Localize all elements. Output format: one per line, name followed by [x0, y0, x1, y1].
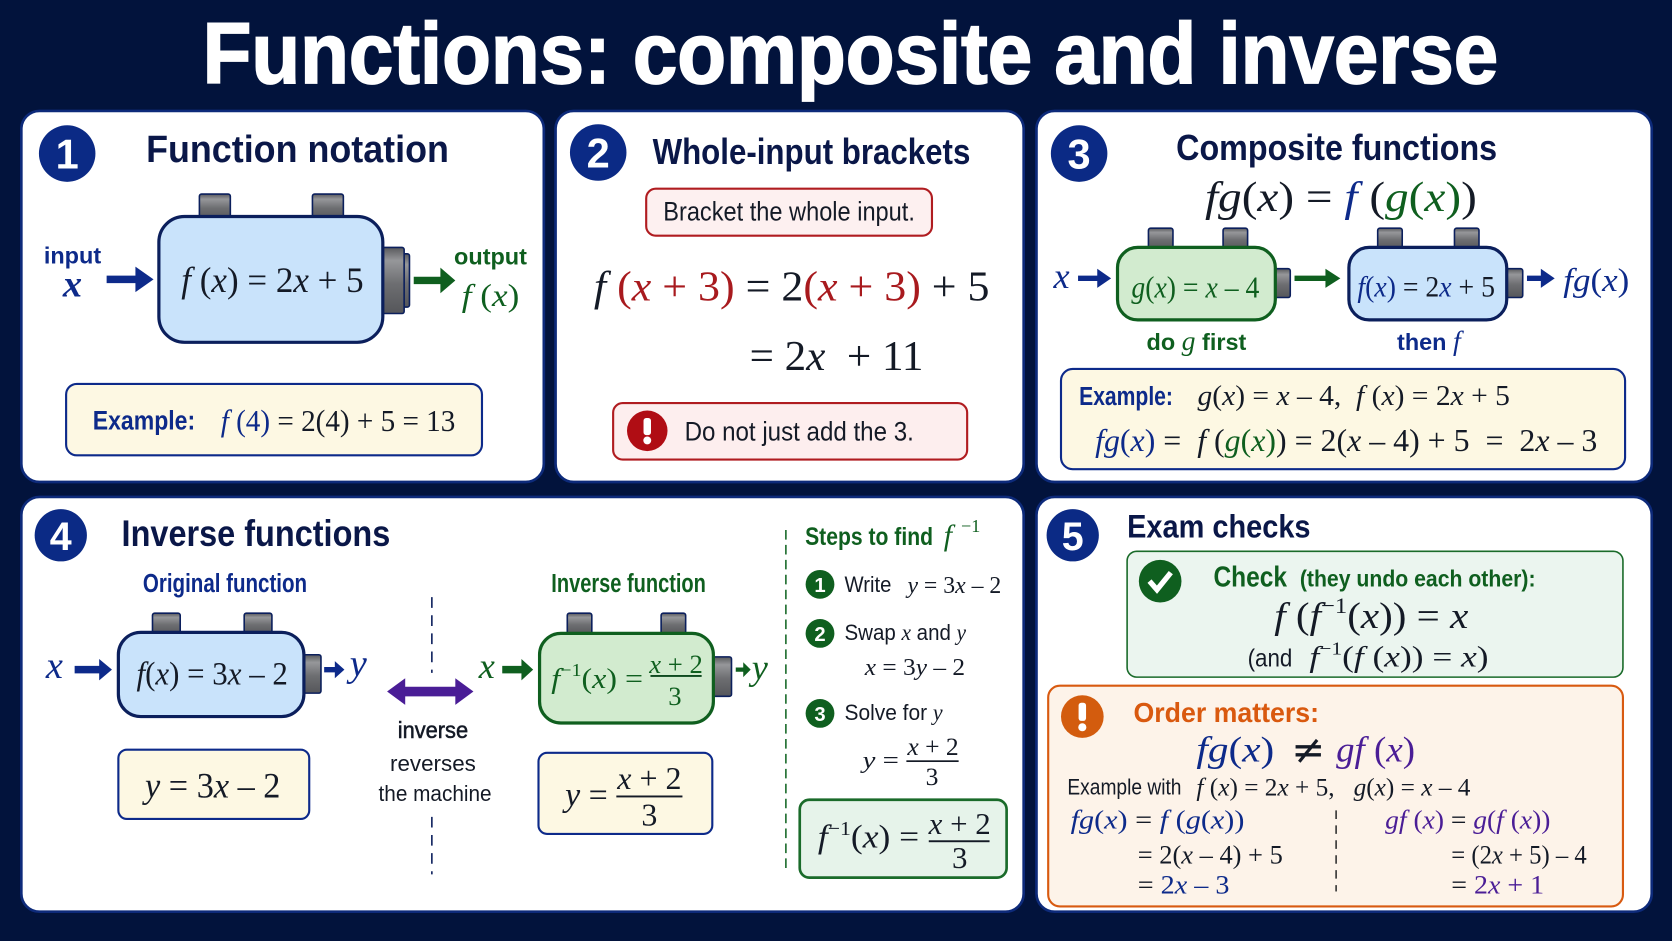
working: gf: gf (x) = g(f (x)) [1385, 805, 1550, 835]
badge 2 [570, 124, 626, 181]
check box: ( [1342, 640, 1354, 673]
badge 1: 1 [56, 130, 79, 177]
result box: f [818, 820, 832, 856]
working: gf: = 2x + 1 [1451, 870, 1544, 900]
step 1: 1 [814, 575, 826, 597]
double arrow [387, 678, 473, 705]
badge 2: 2 [587, 129, 610, 176]
inverse machine: x + 2 [648, 649, 703, 679]
equation box: y = (x+2)/3 [538, 753, 712, 834]
order matters box: Example with [1067, 774, 1181, 799]
inverse machine: f [551, 663, 565, 695]
composite formula: fg(x) = f (g(x)) [1205, 174, 1477, 221]
steps heading: Steps to find [805, 524, 933, 551]
result box: ( [851, 820, 863, 856]
result box: −1 [828, 818, 851, 840]
inequality: fg(x) [1196, 729, 1274, 769]
example box: g(x) = x – 4, f (x) = 2x + 5 [1197, 380, 1510, 412]
example box [1061, 369, 1625, 469]
check box: ( [1347, 596, 1361, 637]
step 1 [806, 570, 1001, 599]
inverse machine: ( [582, 663, 592, 695]
title: Functions: composite and inverse [203, 6, 1498, 102]
working: gf [1385, 805, 1587, 900]
arrow out green [736, 662, 751, 677]
equation box: y = (x+2)/3: 3 [641, 796, 657, 832]
check box: x)) = x [1361, 596, 1467, 637]
machine f [1349, 228, 1523, 320]
badge 3 [1051, 125, 1107, 182]
output arrow [414, 268, 455, 293]
heading: function notation: Function notation [146, 128, 449, 171]
heading: inverse functions: Inverse functions [122, 512, 390, 554]
arrow out [324, 661, 344, 678]
caption: inverse reverses the machine: inverse [398, 717, 468, 743]
inverse function label: Inverse function [551, 570, 706, 598]
caption: then f: then f [1397, 325, 1464, 356]
example box: f (4) = 2(4) + 5 = 13 [221, 403, 455, 438]
step 2: Swap x and y [845, 620, 967, 646]
panel 1: function notation [21, 111, 544, 482]
equation line 1: f (x + 3) = 2(x + 3) + 5 [594, 264, 990, 311]
inverse machine: 3 [668, 681, 682, 711]
order matters box [1048, 686, 1623, 906]
input arrow [107, 267, 154, 292]
step 3: 3 [926, 762, 938, 791]
result box: 3 [952, 840, 967, 875]
original function label: Original function [143, 570, 307, 598]
panel 2: whole-input brackets [556, 111, 1024, 482]
icon: warning [1061, 695, 1104, 738]
check box: f (f [1274, 596, 1320, 637]
working: fg [1071, 805, 1283, 900]
icon: check [1139, 560, 1181, 602]
output y: y [346, 643, 368, 685]
panel 5: exam checks [1036, 497, 1652, 912]
output label: f (x) [462, 277, 519, 313]
input x green: x [478, 646, 495, 686]
equation line 2: = 2x + 11 [750, 333, 923, 380]
steps heading: −1 [952, 516, 980, 536]
caption: inverse reverses the machine: reverses [390, 751, 476, 776]
arrow between machines [1295, 269, 1340, 288]
badge 1 [39, 125, 95, 182]
example box: Example: [93, 406, 195, 436]
warning box: Do not just add the 3. [685, 416, 914, 446]
result box: x) = [863, 820, 916, 856]
arrow out [1527, 269, 1555, 288]
machine g [1118, 228, 1290, 320]
heading: exam checks: Exam checks [1127, 508, 1311, 544]
example box: fg(x) = f (g(x)) = 2(x – 4) + 5 = 2x – 3 [1095, 422, 1597, 458]
check box: (and [1248, 645, 1292, 672]
order matters box: f (x) = 2x + 5, g(x) = x – 4 [1196, 772, 1471, 801]
arrow in green [502, 659, 533, 680]
step 2: x = 3y – 2 [864, 654, 965, 681]
step 2 [806, 619, 967, 681]
panel 4: inverse functions [21, 497, 1024, 912]
step 2: 2 [814, 624, 826, 646]
check box: (they undo each other): [1300, 565, 1536, 591]
order matters box: Order matters: [1134, 697, 1319, 728]
working: fg: = 2(x – 4) + 5 [1138, 840, 1283, 870]
arrow in [1078, 269, 1111, 288]
inequality: gf (x) [1336, 729, 1415, 769]
warning box [613, 403, 967, 460]
original machine: f(x) = 3x – 2 [136, 657, 288, 693]
result box: x + 2 [928, 806, 991, 841]
inequality [1196, 726, 1415, 774]
output label [454, 243, 527, 313]
check box [1127, 551, 1623, 677]
working: gf: = (2x + 5) – 4 [1451, 840, 1587, 870]
step 3: x + 2 [906, 732, 959, 761]
input label [44, 242, 101, 305]
input label: input [44, 242, 101, 268]
equation box: y = (x+2)/3: y = [562, 777, 608, 814]
machine g: g(x) = x – 4 [1131, 270, 1259, 305]
equation box: y = 3x - 2: y = 3x – 2 [141, 766, 280, 806]
step 3 [806, 699, 959, 791]
caption: do g first: do g first [1147, 325, 1247, 356]
panel 3: composite functions [1036, 111, 1652, 482]
result box [800, 800, 1007, 878]
inverse machine [540, 613, 732, 723]
badge 5: 5 [1062, 515, 1084, 559]
step 3: y = [859, 747, 899, 774]
rule box [646, 189, 932, 236]
function machine [159, 194, 409, 342]
input label: x [62, 263, 82, 305]
step 3: Solve for y [845, 700, 943, 726]
step 1: Write [845, 572, 891, 597]
caption: inverse reverses the machine: the machine [379, 781, 492, 806]
check box: −1 [1319, 639, 1342, 659]
check box: f (x)) = x) [1354, 640, 1487, 673]
steps panel [800, 516, 1007, 878]
output fg(x): fg(x) [1563, 263, 1629, 299]
equation box: y = 3x - 2 [118, 750, 309, 819]
equation box: y = (x+2)/3: x + 2 [616, 760, 682, 796]
working: fg: = 2x – 3 [1138, 870, 1229, 900]
machine f: f(x) = 2x + 5 [1357, 270, 1495, 303]
badge 4 [35, 509, 87, 561]
input x: x [1053, 256, 1070, 296]
rule box: Bracket the whole input. [663, 197, 915, 227]
example box: Example: [1079, 383, 1173, 411]
heading: whole-input brackets: Whole-input brackets [653, 131, 970, 172]
original machine [118, 613, 321, 717]
caption: inverse reverses the machine [379, 717, 492, 806]
step 3: 3 [814, 704, 826, 726]
inverse machine: x) = [592, 663, 639, 695]
example box [66, 384, 482, 455]
heading: composite functions: Composite functions [1176, 127, 1497, 168]
step 1: y = 3x – 2 [905, 572, 1001, 599]
input x: x [45, 645, 63, 687]
arrow in [75, 659, 112, 680]
check box: −1 [1321, 593, 1347, 618]
output label: output [454, 243, 527, 269]
inverse machine: −1 [560, 660, 582, 680]
check box: Check [1213, 561, 1288, 593]
working: fg: fg(x) = f (g(x)) [1071, 805, 1244, 835]
inequality: ≠ [1291, 726, 1325, 774]
badge 3: 3 [1068, 130, 1091, 177]
steps heading: f [944, 519, 956, 552]
function machine: f (x) = 2x + 5 [181, 260, 364, 300]
badge 4: 4 [50, 515, 72, 559]
output y green: y [748, 647, 769, 687]
badge 5 [1047, 509, 1099, 561]
check box: f [1309, 640, 1324, 673]
